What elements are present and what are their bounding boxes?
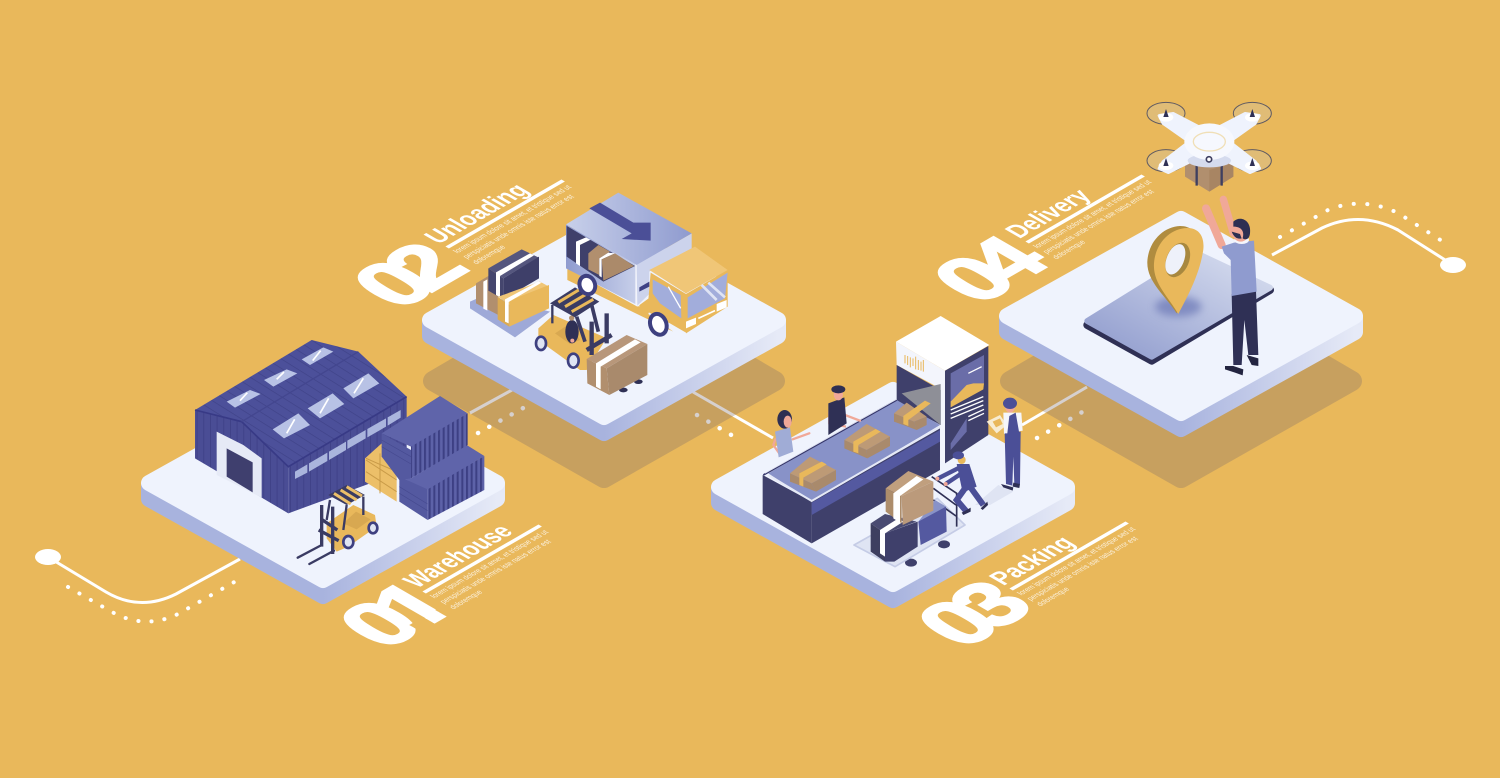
step 02 text block [418,164,594,267]
shadow under delivery platform [1010,281,1352,478]
step 03 description: doloremque [1034,585,1072,608]
standing worker [987,398,1023,491]
location pin [1147,226,1204,314]
step 02 title: Unloading [418,179,535,248]
panel: unloading platform [422,223,786,433]
rotors [1147,102,1271,172]
step 02 description: perspiciatis unde omnis iste natus error est [460,193,577,260]
step 01 description: perspiciatis unde omnis iste natus error est [437,538,554,605]
illustration: warehouse building and containers [195,340,484,564]
yellow box [498,282,549,327]
route line: packing to delivery [1022,387,1087,438]
truck back wheel [577,274,598,296]
roof skylights [227,347,379,438]
conveyor base [763,428,940,543]
step 04 title: Delivery [999,185,1097,242]
man in dark shirt [828,385,860,435]
cart [854,477,965,567]
cargo roof [566,193,692,265]
illustration: delivery truck [566,193,728,337]
step 01 text block [396,509,571,610]
step 04 description: doloremque [1050,238,1088,261]
route line: delivery to end [1272,204,1466,273]
warehouse roof [195,340,407,467]
step 02 number: 02 [330,231,486,321]
route line: warehouse to unloading [470,390,525,433]
machine body [896,316,989,463]
dark box [488,249,539,299]
warehouse door [217,432,262,498]
step 04 text block [999,159,1174,261]
warehouse walls [195,397,407,513]
cart boxes [871,471,947,562]
illustration: cart and workers [854,398,1023,567]
man [1206,199,1258,375]
forklift [298,485,377,564]
illustration: packing conveyor, machine and workers [763,316,989,543]
brown box behind [476,276,498,315]
conveyor belt [763,399,940,515]
shipping container bottom [399,445,484,520]
truck chassis [567,268,673,332]
step 02 description: lorem ipsum dolore sit amet, et tristique sed ut [451,183,574,255]
step 03 description: lorem ipsum dolore sit amet, et tristique sed ut [1015,525,1138,597]
illustration: stacked boxes and forklift on unloading platform [470,249,647,395]
step 04 description: perspiciatis unde omnis iste natus error est [1040,188,1157,255]
step 03 number: 03 [894,569,1051,660]
step 01 title: Warehouse [396,520,519,592]
parcel [1185,163,1233,192]
pallet [470,295,550,337]
carrier worker [935,451,988,515]
cargo interior [566,224,639,307]
machine screen chart [951,355,984,450]
illustration: delivery tablet, pin and man [1087,199,1270,375]
truck front wheel [647,312,669,337]
panel: packing platform [711,390,1075,600]
step 04 number: 04 [910,223,1070,316]
step 01 description: lorem ipsum dolore sit amet, et tristique sed ut [428,528,551,600]
step 01 description: doloremque [447,588,485,611]
shadow under unloading platform [433,281,775,478]
wooden crates [365,443,397,502]
drone body [1159,109,1260,172]
step 01 number: 01 [316,569,474,661]
route line: start to warehouse [35,549,240,622]
woman [773,410,809,457]
illustration: drone with parcel [1147,102,1271,192]
step 03 text block [983,506,1158,608]
forklift with driver [536,287,612,370]
route line: unloading to packing [693,392,773,438]
panel: warehouse platform [141,386,505,596]
step 04 description: lorem ipsum dolore sit amet, et tristique sed ut [1031,178,1154,250]
tablet [1087,253,1270,361]
panel: delivery platform [999,219,1363,429]
step 03 title: Packing [983,532,1081,589]
step 02 description: doloremque [470,243,508,266]
step 03 description: perspiciatis unde omnis iste natus error est [1024,535,1141,602]
truck cab [647,247,728,333]
belt boxes [790,401,931,492]
shipping container top [382,396,468,480]
large brown box [587,335,647,395]
cargo end face [637,233,692,306]
wall window strip [295,410,401,479]
floor shadow [975,485,1013,505]
arrow on roof [589,203,651,241]
